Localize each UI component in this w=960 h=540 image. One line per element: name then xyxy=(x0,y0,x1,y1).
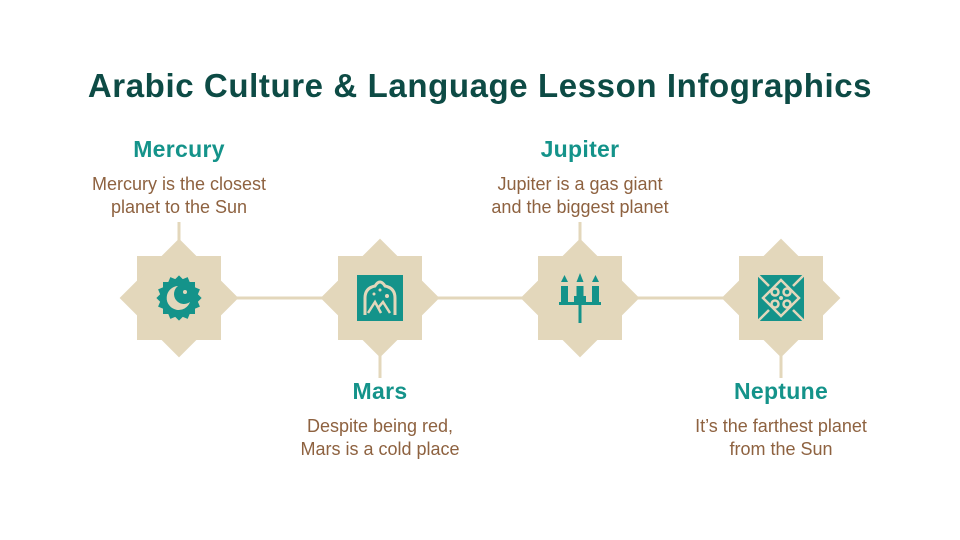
text: Mercury: Mercury xyxy=(133,136,225,162)
text: Neptune xyxy=(695,378,867,459)
text: Jupiter xyxy=(491,136,669,217)
text: Mars: Mars xyxy=(353,378,407,404)
text: Mars: Mars is a cold place xyxy=(300,439,460,459)
text: Jupiter: Jupiter xyxy=(541,136,619,162)
text: Mercury: Mercury is the closest xyxy=(92,174,266,194)
text: Jupiter: and the biggest planet xyxy=(491,197,669,217)
icon: tile pattern xyxy=(722,239,840,357)
text: Neptune: Neptune xyxy=(734,378,828,404)
title: Arabic Culture & Language Lesson Infographics xyxy=(88,67,872,104)
text: Jupiter: Jupiter is a gas giant xyxy=(497,174,663,194)
text: Neptune: from the Sun xyxy=(729,439,833,459)
text: Mercury xyxy=(92,136,266,217)
icon: candelabra xyxy=(521,239,639,357)
icon: moon star xyxy=(120,239,238,357)
text: Neptune: It’s the farthest planet xyxy=(695,416,867,436)
text: Mercury: planet to the Sun xyxy=(111,197,247,217)
icon: arch dome xyxy=(321,239,439,357)
text: Mars xyxy=(300,378,460,459)
text: Mars: Despite being red, xyxy=(307,416,453,436)
